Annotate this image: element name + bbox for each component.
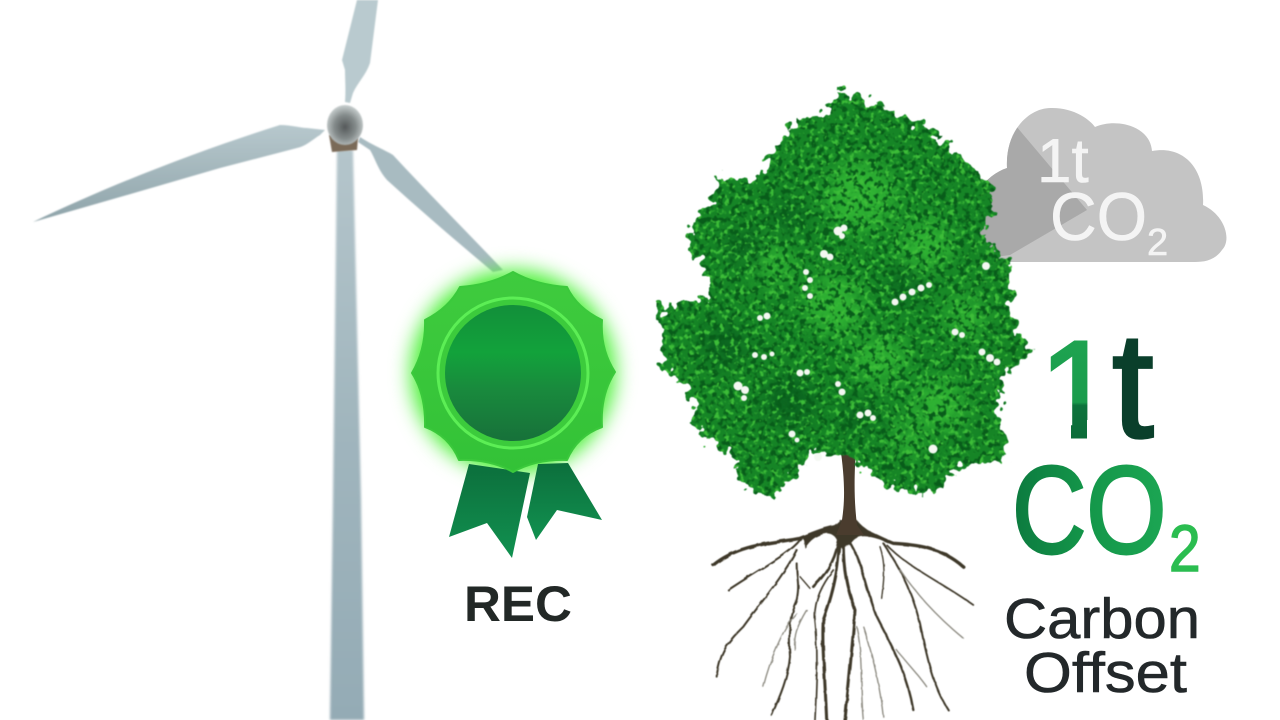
1t heading — [1036, 301, 1154, 469]
turbine blade: top — [342, 0, 378, 103]
badge label: REC — [464, 576, 572, 632]
badge ring — [438, 298, 588, 448]
root crown — [803, 520, 883, 548]
badge center disc — [445, 305, 581, 441]
carbon offset text: Offset — [1024, 641, 1187, 705]
1t heading: t — [1112, 301, 1154, 469]
carbon offset label — [1004, 301, 1201, 705]
CO2 heading: CO — [1012, 442, 1166, 580]
cloud text: CO — [1050, 179, 1147, 255]
carbon offset text — [1004, 587, 1200, 705]
cloud text — [1037, 127, 1168, 264]
turbine hub — [327, 105, 363, 145]
tree trunk — [836, 445, 864, 535]
1t heading: 1 — [1039, 313, 1116, 467]
CO2 heading: 2 — [1169, 512, 1201, 586]
hide numeral foot — [1036, 420, 1071, 442]
turbine tower — [330, 150, 364, 720]
CO2 cloud — [980, 108, 1226, 262]
carbon offset text: Carbon — [1004, 587, 1200, 651]
badge ribbons — [449, 463, 602, 558]
REC badge — [411, 270, 615, 632]
cloud shape — [980, 108, 1226, 262]
tree — [660, 90, 1030, 720]
turbine blade: right — [358, 137, 503, 272]
badge glow — [411, 270, 615, 474]
tree canopy gaps — [734, 224, 1000, 461]
turbine collar — [329, 135, 358, 152]
cloud text: 1t — [1037, 127, 1089, 196]
wind turbine — [33, 0, 503, 720]
turbine blade: left — [33, 125, 325, 222]
badge scalloped seal — [412, 272, 615, 472]
tree foliage — [660, 90, 1030, 497]
cloud text: 2 — [1147, 222, 1168, 264]
tree roots — [713, 520, 973, 720]
